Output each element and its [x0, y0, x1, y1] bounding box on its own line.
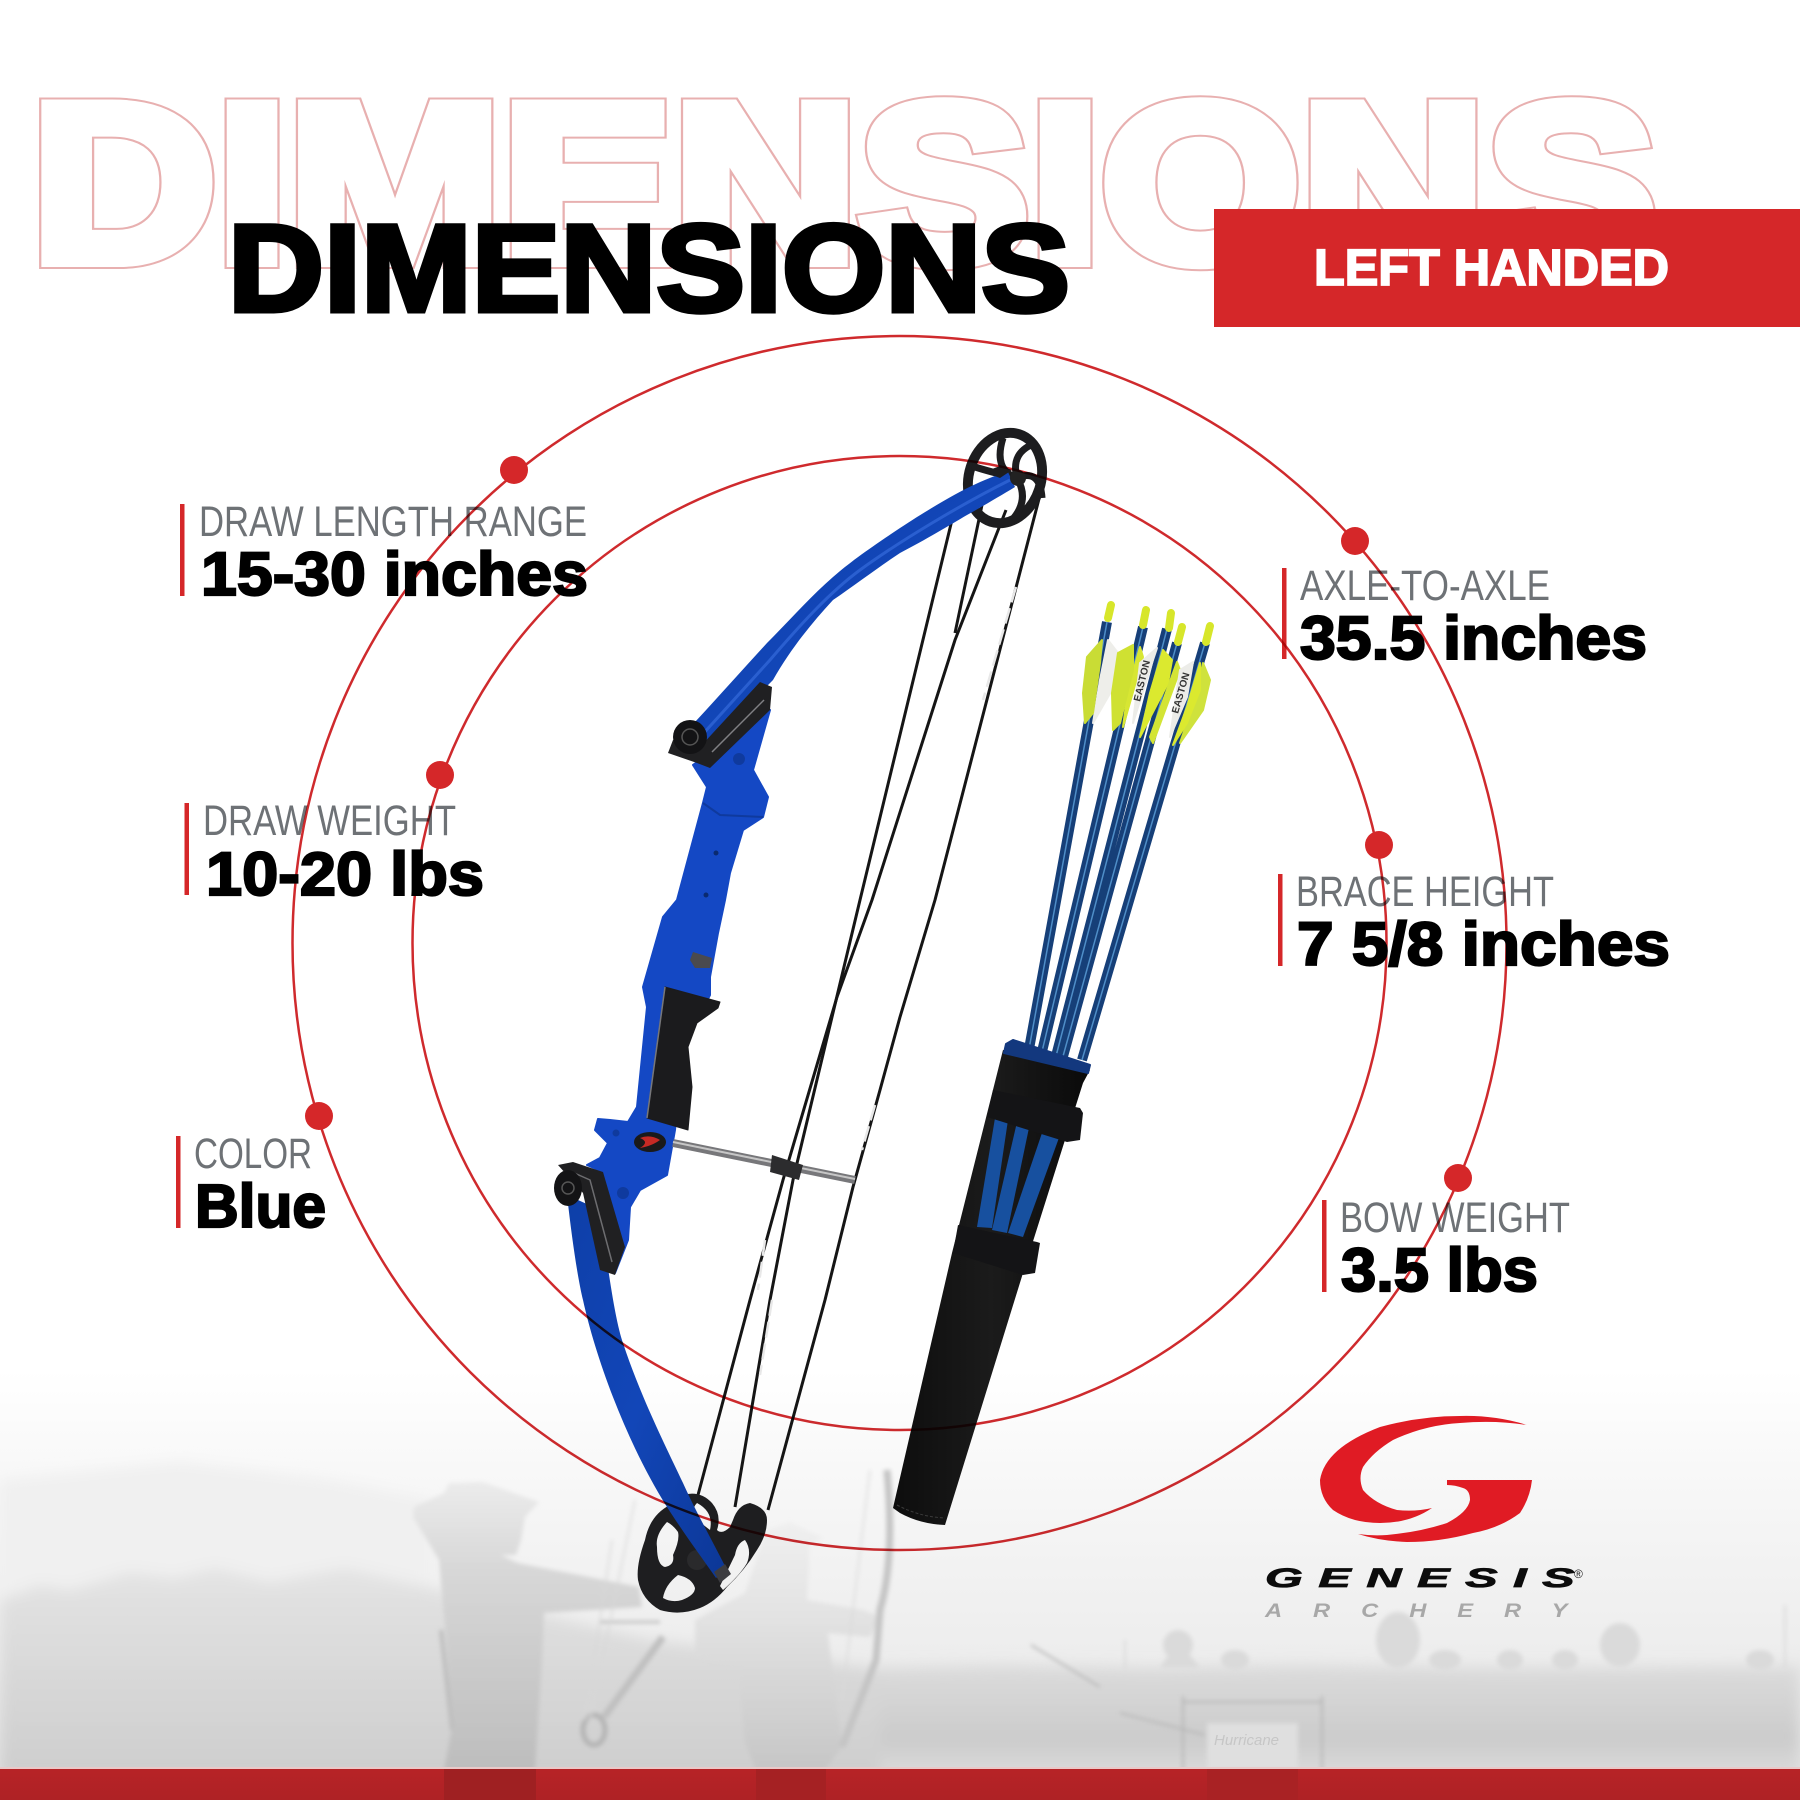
spec: draw weight: DRAW WEIGHT [203, 797, 456, 845]
nocks [1108, 605, 1210, 642]
spec: draw length range [180, 498, 588, 608]
spec: color [176, 1130, 326, 1240]
target banner text: Hurricane [1214, 1732, 1279, 1749]
logo subline: ARCHERY [1264, 1600, 1569, 1621]
compound bow [554, 423, 1053, 1613]
logo: Genesis Archery [1264, 1416, 1583, 1621]
grip [647, 987, 720, 1130]
riser badge [634, 1132, 666, 1152]
upper limb pocket [668, 682, 772, 768]
spec: brace height: 7 5/8 inches [1297, 910, 1670, 978]
background title: outlined DIMENSIONS: DIMENSIONS [31, 56, 1657, 309]
spec: draw weight: 10-20 lbs [206, 840, 484, 908]
spec: axle-to-axle [1282, 562, 1647, 672]
spec: axle-to-axle: AXLE-TO-AXLE [1300, 562, 1550, 610]
registered mark: ® [1574, 1567, 1583, 1581]
blue webbing [977, 1118, 1060, 1237]
lower cam wheel [638, 1494, 767, 1613]
arrows [1027, 605, 1210, 1060]
banner: left handed: LEFT HANDED [1314, 239, 1669, 296]
top cam wheel [957, 423, 1053, 533]
banner: left handed [1214, 209, 1800, 327]
spec: axle-to-axle: 35.5 inches [1300, 604, 1647, 672]
sight bar [673, 1142, 855, 1180]
vane text: EASTON [1170, 671, 1192, 715]
lower cam hub [687, 1550, 707, 1570]
vane text: EASTON [1132, 659, 1153, 703]
bottom red bar [0, 1767, 1800, 1800]
spec: draw length range: DRAW LENGTH RANGE [199, 498, 587, 546]
concentric circles with marker dots [292, 336, 1506, 1550]
limb tip [714, 1564, 731, 1583]
spec: bow weight: 3.5 lbs [1341, 1236, 1538, 1304]
lower limb pocket [554, 1162, 625, 1275]
distant trees [1125, 1605, 1785, 1670]
logo mark [1320, 1416, 1532, 1542]
title: DIMENSIONS: DIMENSIONS [228, 200, 1070, 338]
background title: outlined DIMENSIONS: DIMENSIONS [31, 56, 1657, 309]
fletchings [1083, 640, 1210, 745]
spec: draw length range: 15-30 inches [201, 540, 588, 608]
rest clip [690, 952, 712, 968]
spec: bow weight: BOW WEIGHT [1340, 1194, 1570, 1242]
spec: color: Blue [195, 1172, 326, 1240]
spec: brace height [1278, 868, 1670, 978]
arrow shafts [1027, 622, 1205, 1060]
lower limb [567, 1195, 727, 1578]
logo wordmark: GENESIS [1265, 1563, 1575, 1593]
bow strings and cables [698, 495, 1040, 1510]
spec: bow weight [1322, 1194, 1570, 1304]
upper limb [695, 472, 1015, 750]
archer silhouettes [413, 1470, 1322, 1770]
spec: color: COLOR [194, 1130, 312, 1178]
riser [587, 710, 770, 1273]
straps [953, 1090, 1083, 1275]
spec: brace height: BRACE HEIGHT [1296, 868, 1554, 916]
spec: draw weight [184, 797, 484, 908]
quiver [893, 1040, 1090, 1525]
